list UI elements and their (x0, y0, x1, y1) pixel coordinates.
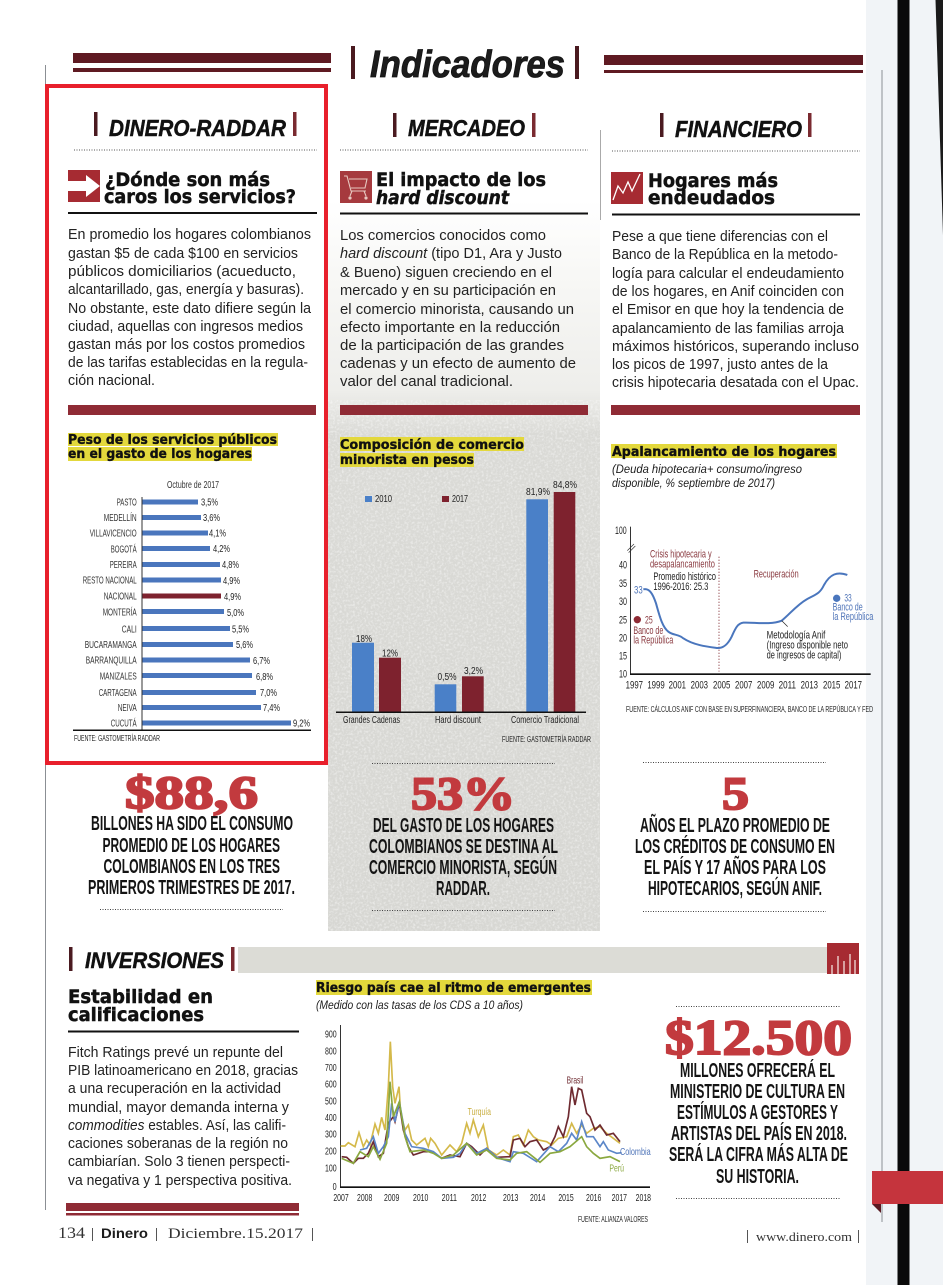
bar chart: composición: 18% (356, 634, 372, 645)
bar chart: peso de servicios: PASTO (117, 498, 137, 508)
bar chart: peso de servicios: PEREIRA (110, 560, 137, 571)
callout: $88,6: BILLONES HA SIDO EL CONSUMO (91, 813, 293, 835)
line chart: apalancamiento: 2009 (757, 679, 774, 691)
text block: hard discount: mercado y en su participación en (340, 282, 556, 299)
text block: servicios: gastan más por los costos promedios (68, 336, 305, 353)
line chart: riesgo país: 2018 (636, 1193, 651, 1204)
line chart: apalancamiento: 10 (619, 669, 627, 681)
bar chart: peso de servicios: CALI (122, 624, 137, 636)
footer: folio left: Dinero (101, 1225, 148, 1241)
text block: Fitch: caciones soberanas de la región no (68, 1135, 288, 1152)
text block: endeudamiento: Banco de la República en la metodo- (612, 246, 838, 263)
chart title (340, 437, 524, 468)
line chart: apalancamiento: 30 (619, 596, 627, 608)
text block: hard discount: cadenas y un efecto de aumento de (340, 355, 576, 372)
bar chart: peso de servicios: NEIVA (118, 703, 137, 714)
bar chart: peso de servicios (73, 497, 311, 731)
chart title: minorista en pesos (340, 452, 474, 468)
line chart: riesgo país: 800 (325, 1046, 337, 1057)
callout: $88,6: COLOMBIANOS EN LOS TRES (104, 856, 280, 878)
line chart: riesgo país: Turquía (468, 1107, 491, 1118)
line chart: riesgo país: 2016 (586, 1193, 601, 1204)
bar chart: peso de servicios: NACIONAL (104, 592, 137, 602)
bar chart: peso de servicios: 7,4% (263, 703, 280, 714)
bar chart: peso de servicios: BOGOTÁ (111, 542, 137, 556)
icon: shopping cart (340, 171, 372, 203)
bar chart: peso de servicios: 9,2% (293, 718, 310, 730)
red highlight frame (47, 86, 326, 763)
line chart: apalancamiento: 33 (844, 593, 852, 605)
text block: servicios: ciudad, aquellas con ingresos medios (68, 318, 303, 335)
bar chart: peso de servicios: 7,0% (260, 688, 277, 699)
line chart: riesgo país: 2012 (471, 1193, 486, 1204)
line chart: riesgo país: 2015 (558, 1193, 574, 1204)
callout: 5: AÑOS EL PLAZO PROMEDIO DE (640, 814, 830, 837)
line chart: riesgo país: 2007 (333, 1193, 349, 1204)
line chart: riesgo país (325, 1025, 651, 1204)
callout: $12.500: ESTÍMULOS A GESTORES Y (677, 1101, 838, 1124)
heading: servicios (68, 169, 317, 214)
panel: riesgo país chart (316, 980, 651, 1224)
text block: hard discount: efecto importante en la reducción (340, 319, 560, 336)
bar chart: peso de servicios: RESTO NACIONAL (83, 576, 137, 586)
section heading: Mercadeo: MERCADEO (408, 115, 525, 141)
line chart: apalancamiento: 1997 (626, 679, 643, 691)
text block: hard discount: de la participación de las grandes (340, 337, 564, 354)
callout: $88,6: PRIMEROS TRIMESTRES DE 2017. (88, 877, 295, 899)
bar chart: peso de servicios: MANIZALES (100, 672, 137, 682)
callout: 5: 5 (722, 768, 749, 820)
bar chart: peso de servicios: 4,2% (213, 544, 230, 555)
panel: comercio minorista chart (336, 437, 591, 744)
text block: hard discount: el comercio minorista, causando un (340, 301, 574, 318)
legend (365, 494, 468, 505)
section heading: Financiero (612, 113, 860, 151)
bar chart: composición: 81,9% (526, 487, 550, 498)
callout: $88,6: PROMEDIO DE LOS HOGARES (102, 835, 280, 857)
heading: endeudados: Hogares más (648, 170, 778, 192)
bar chart: composición: Comercio Tradicional (511, 715, 579, 726)
line chart: apalancamiento: 25 (645, 615, 653, 627)
text block: Fitch: commodities estables. Así, las califi- (68, 1117, 286, 1134)
line chart: riesgo país: 2014 (530, 1193, 546, 1204)
chart title: (Deuda hipotecaria+ consumo/ingreso (612, 464, 803, 476)
bar chart: peso de servicios: 5,0% (227, 608, 244, 619)
chart title (611, 444, 837, 490)
line chart: riesgo país: 2008 (357, 1193, 372, 1204)
line chart: riesgo país: Perú (609, 1164, 624, 1175)
line chart: riesgo país: 2011 (442, 1193, 457, 1204)
line chart: apalancamiento: 1996-2016: 25.3 (653, 581, 708, 593)
icon: arrow (68, 170, 100, 202)
bar chart: composición: 84,8% (553, 480, 577, 491)
bar chart: peso de servicios: 6,8% (256, 672, 273, 683)
text block: servicios (68, 226, 312, 389)
bar chart: peso de servicios: 4,9% (224, 592, 241, 603)
section heading: Inversiones: INVERSIONES (85, 948, 224, 973)
heading: hard discount: hard discount (376, 187, 510, 209)
line chart: apalancamiento: 2013 (801, 679, 818, 691)
heading: servicios: caros los servicios? (104, 186, 296, 208)
callout: 53%: COLOMBIANOS SE DESTINA AL (369, 836, 558, 858)
line chart: apalancamiento: 2003 (691, 679, 708, 691)
text block: endeudamiento: de los hogares, en Anif coinciden con (612, 283, 844, 300)
callout: $12.500: MILLONES OFRECERÁ EL (680, 1059, 835, 1082)
section heading: Dinero-Raddar (74, 112, 317, 150)
panel: Dinero-Raddar text (68, 112, 317, 415)
line chart: apalancamiento: (Ingreso disponible neto (767, 639, 848, 651)
line chart: apalancamiento: 20 (619, 632, 627, 644)
line chart: apalancamiento: 2011 (779, 679, 796, 691)
text block: Fitch: Fitch Ratings prevé un repunte del (68, 1044, 283, 1061)
callout: 53%: COMERCIO MINORISTA, SEGÚN (369, 855, 557, 879)
chart title: en el gasto de los hogares (68, 446, 252, 462)
heading: servicios: ¿Dónde son más (105, 169, 270, 191)
text block: Fitch: PIB latinoamericano en 2018, gracias (68, 1062, 298, 1079)
line chart: apalancamiento: la República (633, 634, 674, 646)
line chart: apalancamiento: 100 (615, 525, 627, 537)
bar chart: peso de servicios: 5,5% (232, 624, 249, 636)
line chart: riesgo país: Brasil (567, 1075, 583, 1086)
text block: servicios: ción nacional. (68, 372, 155, 389)
callout: 5: EL PAÍS Y 17 AÑOS PARA LOS (644, 856, 826, 879)
line chart: apalancamiento: desapalancamiento (650, 558, 715, 570)
callout: 5 (635, 762, 835, 912)
line chart: apalancamiento: 2015 (823, 679, 840, 691)
text block: Fitch (68, 1044, 298, 1189)
line chart: riesgo país: 500 (325, 1096, 337, 1107)
text block: endeudamiento: el Emisor en que hoy la tendencia de (612, 301, 844, 318)
text block: servicios: de las tarifas establecidas en la regula- (68, 354, 308, 371)
bar chart: peso de servicios: CUCUTÁ (111, 716, 137, 730)
line chart: riesgo país: 2009 (384, 1193, 399, 1204)
text block: hard discount: hard discount (tipo D1, Ara y Justo (340, 245, 562, 262)
legend: 2017 (452, 494, 468, 505)
callout: 53%: DEL GASTO DE LOS HOGARES (373, 815, 554, 837)
title: Indicadores (73, 44, 863, 86)
line chart: apalancamiento: 33 (634, 584, 643, 596)
heading: calificaciones: Estabilidad en (68, 986, 213, 1008)
panel: servicios bar chart: FUENTE: GASTOMETRÍA RADDAR (74, 734, 160, 743)
chart title: Composición de comercio (340, 437, 524, 453)
heading: calificaciones: calificaciones (68, 1004, 204, 1026)
heading: hard discount: El impacto de los (376, 169, 546, 191)
line chart: apalancamiento: Crisis hipotecaria y (650, 549, 712, 561)
line chart: apalancamiento: 35 (619, 578, 627, 590)
bar chart: peso de servicios: CARTAGENA (99, 688, 137, 699)
text block: servicios: No obstante, este dato difiere según la (68, 300, 312, 317)
line chart: apalancamiento: Banco de (833, 602, 863, 614)
line chart: apalancamiento: Banco de (633, 625, 663, 637)
bar chart: peso de servicios: 4,1% (209, 528, 226, 540)
line chart: riesgo país: Colombia (620, 1147, 651, 1158)
gray central column background (45, 65, 601, 1210)
line chart: riesgo país: 200 (325, 1146, 337, 1157)
line chart: riesgo país: 2010 (413, 1193, 428, 1204)
chart title (316, 980, 592, 1012)
bar chart: peso de servicios: 6,7% (253, 656, 270, 667)
text block: endeudamiento: logía para calcular el endeudamiento (612, 265, 844, 282)
bar chart: peso de servicios: BARRANQUILLA (86, 656, 137, 666)
line chart: riesgo país: 300 (325, 1130, 337, 1141)
chart title: Peso de los servicios públicos (68, 432, 277, 448)
text block: Fitch: va negativa y 1 perspectiva positiva. (68, 1172, 292, 1189)
bar chart: peso de servicios: VILLAVICENCIO (90, 528, 137, 540)
panel: Financiero text (611, 113, 860, 415)
bar chart: peso de servicios: 3,6% (203, 513, 220, 524)
footer: folio left: 134 (58, 1225, 85, 1242)
text block: endeudamiento (612, 228, 859, 391)
icon: rising line chart (611, 172, 643, 204)
text block: hard discount (340, 227, 576, 390)
chart title: disponible, % septiembre de 2017) (612, 478, 775, 490)
icon: bars square (827, 943, 859, 974)
callout: $12.500: $12.500 (665, 1009, 852, 1065)
line chart: riesgo país: 100 (325, 1164, 337, 1175)
text block: endeudamiento: máximos históricos, superando incluso (612, 338, 859, 355)
text block: servicios: gastan $5 de cada $100 en servicios (68, 245, 298, 262)
callout: $12.500 (665, 1006, 852, 1198)
text block: Fitch: a una recuperación en la actividad (68, 1080, 281, 1097)
line chart: riesgo país: 2013 (503, 1193, 518, 1204)
line chart: apalancamiento: 2007 (735, 679, 752, 691)
callout: 53%: 53% (411, 768, 515, 820)
footer: folio left: Diciembre.15.2017 (168, 1226, 304, 1242)
text block: endeudamiento: Pese a que tiene diferencias con el (612, 228, 828, 245)
bar chart: peso de servicios: 3,5% (201, 498, 218, 508)
text block: servicios: alcantarillado, gas, energía y basuras). (68, 281, 304, 298)
section heading: Inversiones (69, 947, 828, 973)
line chart: riesgo país: 400 (325, 1113, 337, 1124)
heading: endeudados (612, 170, 860, 216)
bar chart: peso de servicios: MONTERÍA (103, 606, 137, 618)
callout: 53%: RADDAR. (436, 878, 490, 900)
callout: $88,6: $88,6 (125, 767, 258, 819)
heading: endeudados: endeudados (648, 187, 775, 209)
line chart: apalancamiento: de ingresos de capital) (767, 649, 841, 661)
line chart: apalancamiento: Recuperación (754, 568, 799, 580)
panel: Inversiones text (66, 986, 299, 1216)
text block: servicios: En promedio los hogares colombianos (68, 226, 311, 243)
title: Indicadores: Indicadores (370, 44, 565, 86)
callout: $88,6 (88, 767, 295, 910)
text block: hard discount: & Bueno) siguen creciendo en el (340, 264, 552, 281)
line chart: riesgo país: 900 (325, 1030, 337, 1041)
bar chart: peso de servicios: MEDELLÍN (104, 511, 137, 524)
bar chart: composición: 12% (382, 648, 398, 660)
panel: servicios bar chart (68, 432, 311, 743)
text block: endeudamiento: apalancamiento de las familias arroja (612, 320, 845, 337)
bar chart: composición: Grandes Cadenas (343, 715, 400, 726)
line chart: apalancamiento: 25 (619, 615, 627, 627)
heading: hard discount (340, 169, 588, 214)
right page edge (866, 0, 943, 1285)
line chart: riesgo país: 0 (333, 1182, 337, 1193)
panel: apalancamiento chart (611, 444, 874, 714)
chart title: Apalancamiento de los hogares (612, 444, 836, 460)
line chart: riesgo país: 2017 (612, 1193, 627, 1204)
footer: folio left (58, 1225, 313, 1242)
line chart: apalancamiento: la República (833, 611, 874, 623)
bar chart: composición (336, 480, 586, 726)
line chart: apalancamiento: 15 (619, 650, 627, 662)
callout: 53% (369, 764, 558, 910)
footer: website: www.dinero.com (756, 1229, 852, 1244)
panel: comercio minorista chart: FUENTE: GASTOMETRÍA RADDAR (502, 735, 591, 744)
line chart: apalancamiento: 1999 (647, 679, 665, 691)
panel: servicios bar chart: Octubre de 2017 (167, 480, 219, 491)
text block: servicios: públicos domiciliarios (acueducto, (68, 263, 296, 280)
text block: endeudamiento: los picos de 1997, justo antes de la (612, 356, 829, 373)
callout: 5: HIPOTECARIOS, SEGÚN ANIF. (648, 876, 822, 900)
section heading: Dinero-Raddar: DINERO-RADDAR (109, 115, 286, 141)
bar chart: composición: Hard discount (435, 715, 481, 726)
chart title: (Medido con las tasas de los CDS a 10 años) (316, 1000, 523, 1012)
line chart: apalancamiento: Metodología Anif (767, 629, 826, 641)
chart title: Riesgo país cae al ritmo de emergentes (316, 980, 591, 996)
text block: hard discount: valor del canal tradicional. (340, 373, 513, 390)
panel: riesgo país chart: FUENTE: ALIANZA VALORES (578, 1215, 648, 1224)
legend: 2010 (375, 494, 392, 505)
line chart: apalancamiento (615, 525, 874, 691)
bar chart: peso de servicios: BUCARAMANGA (85, 640, 137, 651)
text block: endeudamiento: crisis hipotecaria desatada con el Upac. (612, 374, 859, 391)
line chart: apalancamiento: 2017 (845, 679, 862, 691)
text block: Fitch: cambiarían. Solo 3 tienen perspecti- (68, 1153, 290, 1170)
text block: hard discount: Los comercios conocidos como (340, 227, 546, 244)
bar chart: composición: 0,5% (438, 672, 457, 683)
chart title (68, 432, 278, 462)
bar chart: peso de servicios: 4,9% (223, 576, 240, 587)
panel: Mercadeo text (340, 113, 588, 415)
section heading: Mercadeo (340, 113, 588, 150)
line chart: apalancamiento: 40 (619, 560, 627, 572)
line chart: apalancamiento: 2001 (669, 679, 686, 691)
line chart: riesgo país: 700 (325, 1063, 337, 1074)
bar chart: peso de servicios: 4,8% (222, 560, 239, 571)
line chart: riesgo país: 600 (325, 1080, 337, 1091)
bar chart: peso de servicios: 5,6% (236, 640, 253, 651)
heading: calificaciones (68, 986, 299, 1032)
text block: Fitch: mundial, mayor demanda interna y (68, 1099, 289, 1116)
callout: $12.500: SU HISTORIA. (716, 1166, 799, 1188)
bar chart: composición: 3,2% (464, 666, 483, 677)
section heading: Financiero: FINANCIERO (675, 116, 802, 142)
line chart: apalancamiento: Promedio histórico (653, 571, 716, 583)
line chart: apalancamiento: 2005 (713, 679, 730, 691)
